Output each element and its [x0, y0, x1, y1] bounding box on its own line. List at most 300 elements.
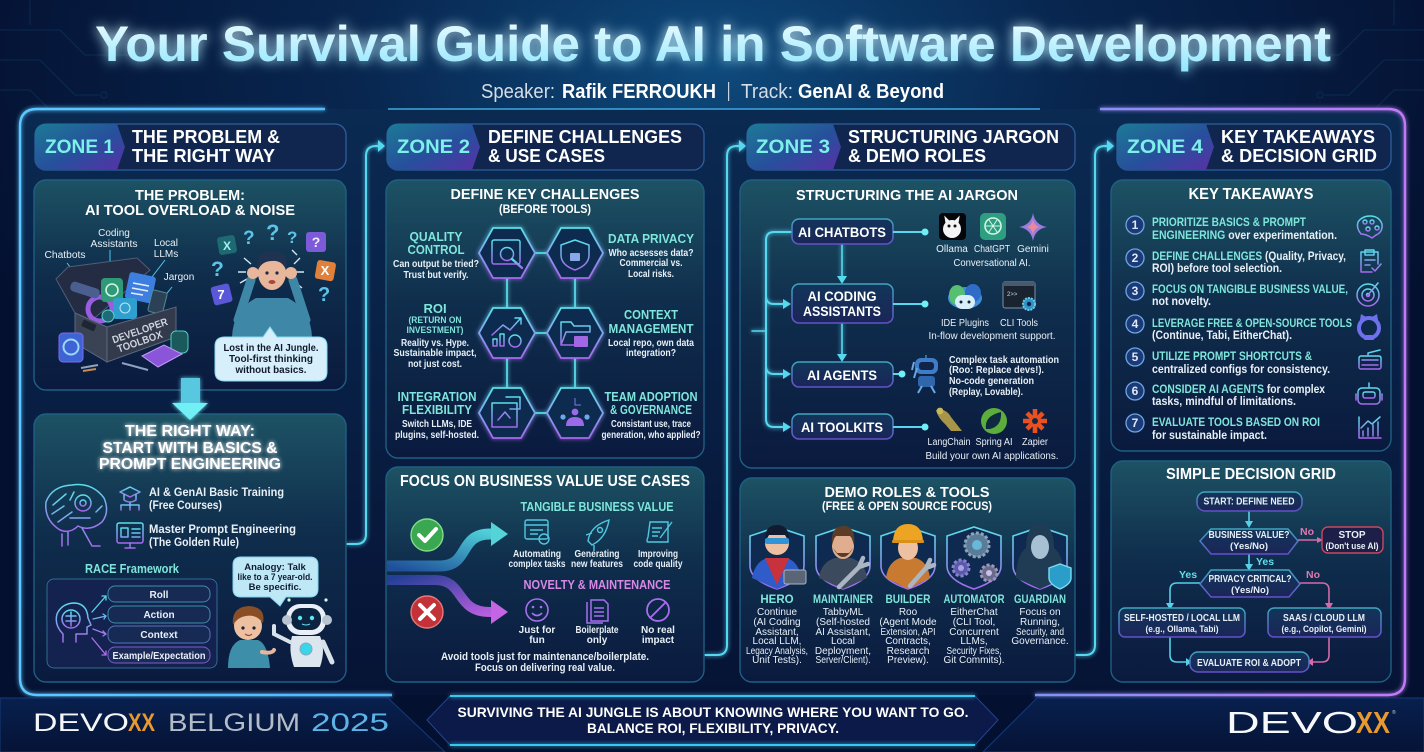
- takeaway 5: UTILIZE PROMPT SHORTCUTS &: [1152, 351, 1312, 363]
- takeaway 1: PRIORITIZE BASICS & PROMPT: [1152, 217, 1306, 229]
- node: start: [1197, 492, 1302, 511]
- challenge: ROI: Reality vs. Hype.: [401, 338, 469, 349]
- tool category labels: [44, 228, 194, 283]
- icon: integration puzzle: [492, 397, 520, 427]
- zone 1 header: THE PROBLEM &: [132, 127, 280, 147]
- RACE framework diagram: [47, 579, 217, 668]
- illustration: overwhelmed developer: ?: [287, 228, 297, 247]
- icon: code review magnifier: [492, 240, 522, 268]
- chatbot labels: Gemini: [1017, 244, 1049, 255]
- heading: key takeaways: KEY TAKEAWAYS: [1188, 186, 1314, 203]
- icon: checklist: [1361, 250, 1381, 272]
- role: builder: Contracts,: [885, 636, 931, 647]
- connector arrow: zone 1 to zone 2: [347, 140, 385, 544]
- heading: define key challenges: [450, 186, 640, 216]
- role: builder: Extension, API: [880, 627, 936, 638]
- role: guardian: Focus on: [1019, 607, 1061, 618]
- node: privacy critical: PRIVACY CRITICAL?: [1208, 574, 1292, 585]
- jargon tree connectors: [752, 232, 842, 427]
- use case: just for fun: Just for: [519, 625, 555, 636]
- role: automator: EitherChat: [950, 607, 998, 618]
- icon: Ollama: [939, 213, 966, 240]
- illustration: boy and robot: [228, 598, 332, 668]
- zone 3 header: ZONE 3: [756, 137, 830, 158]
- prompt engineering text: Master Prompt Engineering: [149, 522, 296, 536]
- footer side panels: [0, 698, 1424, 752]
- icon: monitor: [117, 523, 143, 548]
- zone 1 header: [35, 124, 346, 170]
- takeaway 5: [1152, 351, 1330, 376]
- role: guardian: GUARDIAN: [1014, 594, 1066, 606]
- speaker and track line: Track:: [741, 81, 793, 103]
- role: guardian: Security, and: [1016, 627, 1064, 638]
- logo: Devoxx Belgium 2025: [33, 709, 389, 737]
- role: hero: [746, 525, 808, 666]
- takeaway 1: [1152, 217, 1337, 242]
- challenge: quality control: Trust but verify.: [404, 270, 469, 281]
- role: hero: Local LLM,: [753, 636, 801, 647]
- summary text: Focus on delivering real value.: [475, 662, 615, 674]
- challenge: data privacy: [608, 231, 694, 280]
- label: yes: Yes: [1256, 556, 1274, 568]
- heading: demo roles: (FREE & OPEN SOURCE FOCUS): [822, 501, 992, 513]
- role: maintainer: MAINTAINER: [813, 594, 874, 606]
- RACE items: Roll: [150, 590, 169, 601]
- label: yes left: Yes: [1179, 569, 1197, 581]
- node: self-hosted: (e.g., Ollama, Tabi): [1146, 624, 1218, 635]
- callout: analogy bubble: like to a 7 year-old.: [238, 572, 312, 583]
- coding assistant labels: In-flow development support.: [928, 331, 1056, 342]
- branch dots: [893, 228, 928, 430]
- node: AI coding assistants: AI CODING: [808, 289, 876, 304]
- RACE items: [108, 586, 210, 663]
- use case: generating new features: new features: [571, 559, 623, 570]
- node: SaaS cloud: SAAS / CLOUD LLM: [1283, 613, 1365, 624]
- icon: red cross: [411, 596, 443, 628]
- challenge: team adoption and governance: TEAM ADOPTION: [604, 389, 698, 404]
- toolkit labels: Spring AI: [976, 437, 1012, 448]
- use case: just for fun: [519, 599, 555, 646]
- icon: target: [1357, 283, 1379, 306]
- node: business value: [1200, 529, 1298, 554]
- flow connectors: [1166, 511, 1333, 666]
- RACE items: Example/Expectation: [112, 651, 206, 662]
- RACE items: Context: [140, 630, 178, 641]
- challenge: data privacy: Commercial vs.: [620, 258, 683, 269]
- footer banner: BALANCE ROI, FLEXIBILITY, PRIVACY.: [587, 720, 839, 736]
- node: stop: STOP: [1338, 530, 1366, 541]
- badge numerals: 4: [1132, 317, 1139, 331]
- icon: shield lock: [561, 240, 589, 270]
- arrow: problem to right way: [172, 378, 208, 420]
- callout: analogy bubble: Analogy: Talk: [244, 562, 307, 573]
- node: AI chatbots: [792, 219, 893, 244]
- heading: decision grid: SIMPLE DECISION GRID: [1166, 466, 1336, 483]
- footer banner: [427, 696, 998, 745]
- challenge: integration flexibility: FLEXIBILITY: [402, 402, 472, 417]
- role: automator: Git Commits).: [943, 655, 1005, 666]
- prompt engineering text: [149, 522, 296, 549]
- challenge: integration flexibility: INTEGRATION: [398, 389, 476, 404]
- toolkit labels: Build your own AI applications.: [926, 451, 1058, 462]
- number badges: [1126, 216, 1144, 432]
- takeaway 7: [1152, 417, 1320, 442]
- footer banner: SURVIVING THE AI JUNGLE IS ABOUT KNOWING WHERE YOU WANT TO GO.: [458, 704, 968, 720]
- challenge: quality control: CONTROL: [408, 242, 465, 257]
- node: AI chatbots: AI CHATBOTS: [798, 225, 886, 240]
- role: maintainer: [813, 526, 874, 666]
- logo: Devoxx Belgium 2025: XX: [128, 709, 155, 737]
- badge numerals: 5: [1132, 350, 1139, 364]
- icon: Zapier: [1023, 409, 1047, 433]
- illustration: overwhelmed developer: X: [223, 239, 231, 253]
- takeaway 2: [1152, 251, 1346, 275]
- prompt engineering text: (The Golden Rule): [149, 535, 239, 549]
- logo: Devoxx Belgium 2025: BELGIUM: [168, 709, 300, 737]
- flow arrow: novelty: [387, 580, 508, 624]
- illustration: overwhelmed developer: [210, 220, 336, 337]
- speaker and track line: GenAI & Beyond: [798, 81, 944, 103]
- challenge: ROI: ROI: [423, 301, 447, 316]
- zone 3 header: [747, 124, 1075, 170]
- role: builder: [879, 524, 937, 666]
- panel: key takeaways: [1111, 180, 1391, 451]
- logo: Devoxx: ®: [1392, 709, 1396, 716]
- node: start: START: DEFINE NEED: [1204, 496, 1294, 508]
- heading: the problem: [85, 187, 295, 219]
- training text: AI & GenAI Basic Training: [149, 485, 284, 499]
- tool category labels: LLMs: [154, 249, 178, 260]
- challenge: team adoption and governance: & GOVERNANCE: [610, 402, 692, 417]
- panel: structuring the AI jargon: [740, 180, 1075, 468]
- use case: generating new features: Generating: [574, 549, 620, 560]
- main title: Your Survival Guide to AI in Software Development: [95, 16, 1331, 72]
- role: builder: Roo: [899, 607, 918, 618]
- challenge: ROI: not just cost.: [408, 359, 462, 370]
- role: guardian: [1011, 523, 1071, 647]
- node: business value: (Yes/No): [1230, 541, 1268, 552]
- node: AI coding assistants: [792, 284, 893, 323]
- tool category labels: Assistants: [90, 239, 138, 250]
- icon: developer toolbox: DEVELOPER: [111, 316, 170, 346]
- heading: the right way: START WITH BASICS &: [102, 440, 278, 457]
- badge numerals: 1: [1132, 218, 1139, 232]
- logo: Devoxx: DEVO: [1226, 705, 1358, 740]
- takeaway 4: (Continue, Tabi, EitherChat).: [1152, 330, 1292, 342]
- takeaway 6: CONSIDER AI AGENTS for complex: [1152, 384, 1326, 396]
- coding assistant labels: IDE Plugins: [941, 318, 989, 329]
- node: stop: (Don't use AI): [1326, 541, 1378, 552]
- agent description: (Roo: Replace devs!).: [949, 364, 1044, 376]
- use case: no real impact: impact: [642, 635, 675, 646]
- zone 3 header: & DEMO ROLES: [848, 146, 986, 166]
- challenge: ROI: (RETURN ON: [408, 315, 462, 325]
- role: hero: HERO: [760, 594, 794, 606]
- takeaway 5: centralized configs for consistency.: [1152, 364, 1330, 376]
- node: self-hosted: [1119, 608, 1245, 637]
- label: no right: No: [1306, 569, 1320, 581]
- training text: [149, 485, 284, 512]
- icon: ROI chart: [492, 318, 521, 347]
- icon: GitHub: [1359, 314, 1379, 340]
- use case: boilerplate only: only: [587, 635, 608, 646]
- logo: Devoxx: [1226, 705, 1396, 740]
- challenge: data privacy: Who acsesses data?: [608, 248, 694, 259]
- chatbot labels: Ollama: [936, 244, 968, 255]
- illustration: overwhelmed developer: X: [321, 263, 330, 278]
- callout: analogy bubble: Be specific.: [249, 582, 301, 593]
- illustration: overwhelmed developer: ?: [318, 284, 330, 306]
- challenge: context management: MANAGEMENT: [608, 321, 694, 336]
- role: maintainer: Server/Client).: [816, 655, 870, 666]
- callout: lost in the AI jungle: [215, 327, 327, 381]
- panel: the right way: [34, 414, 346, 682]
- illustration: overwhelmed developer: 7: [217, 287, 225, 302]
- icon: developer toolbox: TOOLBOX: [116, 329, 164, 355]
- icon: Gemini star: [1019, 213, 1047, 241]
- challenge: context management: CONTEXT: [624, 307, 678, 322]
- challenge: quality control: Can output be tried?: [393, 259, 479, 270]
- illustration: overwhelmed developer: ?: [312, 234, 320, 250]
- panel: define key challenges: [386, 180, 704, 458]
- role: hero: Continue: [757, 607, 797, 618]
- callout: analogy bubble: [233, 557, 318, 606]
- RACE items: Action: [143, 610, 175, 621]
- challenge: quality control: [393, 229, 479, 281]
- role: maintainer: TabbyML: [823, 607, 864, 618]
- training text: (Free Courses): [149, 498, 222, 512]
- chatbot labels: Conversational AI.: [954, 258, 1030, 269]
- heading: the right way: [99, 423, 281, 473]
- callout: lost in the AI jungle: Tool-first thinking: [229, 353, 313, 365]
- node: stop: [1322, 527, 1383, 553]
- takeaway 7: EVALUATE TOOLS BASED ON ROI: [1152, 417, 1320, 429]
- role: automator: [943, 527, 1005, 666]
- node: business value: BUSINESS VALUE?: [1208, 530, 1290, 541]
- takeaway 3: not novelty.: [1152, 296, 1211, 308]
- coding assistant labels: [928, 318, 1056, 342]
- illustration: overwhelmed developer: ?: [211, 258, 224, 281]
- role: automator: LLMs,: [960, 636, 988, 647]
- use case: generating new features: [571, 520, 623, 570]
- heading: structuring jargon: STRUCTURING THE AI JARGON: [796, 187, 1018, 204]
- icon: AI agent robot: [912, 355, 938, 393]
- zone 2 header: ZONE 2: [397, 137, 470, 158]
- challenge: quality control: QUALITY: [410, 229, 463, 244]
- use case: no real impact: [641, 599, 675, 646]
- logo: Devoxx Belgium 2025: 2025: [311, 709, 389, 737]
- challenge: integration flexibility: Switch LLMs, IDE: [402, 419, 472, 430]
- use case: improving code quality: Improving: [638, 549, 678, 560]
- challenge: context management: [608, 307, 694, 359]
- panel: demo roles and tools: [740, 478, 1075, 682]
- zone 1 header: THE RIGHT WAY: [132, 146, 275, 166]
- challenge: integration flexibility: [395, 389, 479, 441]
- panel: the problem: [34, 180, 346, 390]
- node: evaluate: EVALUATE ROI & ADOPT: [1197, 658, 1301, 669]
- use case: boilerplate only: [576, 600, 619, 646]
- badge numerals: 2: [1132, 251, 1139, 265]
- heading: RACE framework: RACE Framework: [85, 562, 179, 576]
- icon: brain: [1357, 216, 1382, 238]
- node: evaluate: [1190, 652, 1309, 672]
- takeaway 6: tasks, mindful of limitations.: [1152, 396, 1296, 408]
- connector arrow: zone 3 to zone 4: [1076, 140, 1114, 655]
- challenge: context management: integration?: [626, 348, 676, 359]
- node: SaaS cloud: [1268, 608, 1381, 637]
- heading: demo roles: [822, 485, 992, 513]
- node: AI toolkits: AI TOOLKITS: [801, 420, 883, 435]
- use case: no real impact: No real: [641, 625, 675, 636]
- callout: lost in the AI jungle: Lost in the AI Jungle.: [224, 342, 319, 354]
- role: automator: Security Fixes,: [946, 646, 1002, 657]
- icon: keyboard: [1359, 350, 1381, 369]
- challenge: ROI: Sustainable impact,: [394, 348, 477, 359]
- role: hero: (AI Coding: [753, 617, 801, 628]
- role: automator: AUTOMATOR: [944, 594, 1005, 606]
- takeaway 2: DEFINE CHALLENGES (Quality, Privacy,: [1152, 251, 1346, 263]
- agent description: [949, 354, 1059, 398]
- heading: the problem: AI TOOL OVERLOAD & NOISE: [85, 202, 295, 219]
- heading: the problem: THE PROBLEM:: [135, 187, 245, 204]
- challenge: data privacy: Local risks.: [628, 269, 674, 280]
- zone 2 header: DEFINE CHALLENGES: [488, 127, 682, 147]
- chatbot labels: [936, 244, 1049, 269]
- zone 4 header: & DECISION GRID: [1221, 146, 1377, 166]
- challenge: team adoption and governance: [602, 389, 700, 441]
- icon: folder: [561, 322, 590, 345]
- takeaway 1: ENGINEERING over experimentation.: [1152, 230, 1337, 242]
- role: hero: Assistant,: [755, 627, 799, 638]
- challenge: integration flexibility: plugins, self-hosted.: [395, 430, 479, 441]
- role: maintainer: AI Assistant,: [815, 627, 871, 638]
- tool category labels: Jargon: [164, 272, 194, 283]
- use case: improving code quality: [634, 522, 683, 570]
- icon: graduation cap: [120, 487, 140, 510]
- use case: automating complex tasks: [508, 520, 566, 570]
- heading: the right way: THE RIGHT WAY:: [125, 423, 255, 440]
- heading: business value: FOCUS ON BUSINESS VALUE USE CASES: [400, 473, 690, 490]
- use case: improving code quality: code quality: [634, 559, 683, 570]
- chatbot labels: ChatGPT: [974, 244, 1010, 255]
- icon: IDE plugins: [948, 284, 982, 309]
- zone 2 header: [387, 124, 704, 170]
- role: hero: Unit Tests).: [752, 655, 802, 666]
- use case: boilerplate only: Boilerplate: [576, 625, 619, 636]
- role: builder: (Agent Mode: [879, 617, 937, 628]
- heading: demo roles: DEMO ROLES & TOOLS: [824, 485, 990, 501]
- node: AI toolkits: [792, 414, 893, 439]
- agent description: Complex task automation: [949, 354, 1059, 366]
- icon: Spring AI: [981, 408, 1007, 434]
- role: automator: (CLI Tool,: [953, 617, 995, 628]
- takeaway 3: FOCUS ON TANGIBLE BUSINESS VALUE,: [1152, 284, 1348, 296]
- takeaway 3: [1152, 284, 1348, 308]
- node: AI agents: AI AGENTS: [807, 368, 877, 383]
- toolkit labels: Zapier: [1022, 437, 1049, 448]
- challenge: team adoption and governance: generation, who applied?: [602, 430, 700, 441]
- tool category labels: Chatbots: [44, 250, 86, 261]
- icon: robot: [1356, 383, 1382, 404]
- badge numerals: 3: [1132, 284, 1139, 298]
- use case: automating complex tasks: Automating: [513, 549, 561, 560]
- heading: the right way: PROMPT ENGINEERING: [99, 456, 281, 473]
- zone 3 header: STRUCTURING JARGON: [848, 127, 1059, 147]
- icon: LangChain parrot: [936, 408, 962, 431]
- role: guardian: Running,: [1020, 617, 1060, 628]
- toolkit labels: LangChain: [928, 437, 970, 448]
- role: builder: Research: [887, 646, 929, 657]
- use case: automating complex tasks: complex tasks: [508, 559, 566, 570]
- node: SaaS cloud: (e.g., Copilot, Gemini): [1282, 624, 1366, 635]
- challenge: ROI: [394, 301, 477, 370]
- role: automator: Concurrent: [949, 627, 999, 638]
- heading: define key challenges: (BEFORE TOOLS): [499, 204, 591, 216]
- role: maintainer: (Self-hosted: [816, 617, 870, 628]
- coding assistant labels: CLI Tools: [1000, 318, 1038, 329]
- icon: neon brain: [46, 485, 107, 546]
- role: hero: Legacy Analysis,: [746, 646, 808, 657]
- panel: simple decision grid: [1111, 461, 1391, 682]
- tool category labels: Local: [154, 238, 178, 249]
- use case: just for fun: fun: [529, 635, 545, 646]
- logo: Devoxx Belgium 2025: DEVO: [33, 709, 129, 737]
- zone 4 header: KEY TAKEAWAYS: [1221, 127, 1375, 147]
- tool category labels: Coding: [98, 228, 130, 239]
- role: maintainer: Deployment,: [815, 646, 871, 657]
- takeaway 7: for sustainable impact.: [1152, 430, 1267, 442]
- speaker and track line: Rafik FERROUKH: [562, 81, 716, 103]
- illustration: overwhelmed developer: ?: [243, 228, 255, 249]
- panel: business value use cases: [386, 467, 704, 682]
- summary text: [441, 651, 649, 674]
- role: maintainer: Local: [831, 636, 855, 647]
- icon: developer toolbox: [56, 250, 188, 371]
- zone 4 header: [1117, 124, 1391, 170]
- icon: green check: [411, 519, 443, 551]
- main frame: [20, 109, 1405, 695]
- icon: ChatGPT: [980, 213, 1006, 240]
- challenge: data privacy: DATA PRIVACY: [608, 231, 694, 246]
- node: AI agents: [792, 362, 893, 387]
- zone 2 header: & USE CASES: [488, 146, 605, 166]
- icon: CLI tools: 2>>: [1007, 292, 1018, 298]
- role: guardian: Governance.: [1011, 636, 1069, 647]
- heading: tangible business value: TANGIBLE BUSINESS VALUE: [520, 500, 674, 514]
- agent description: (Replay, Lovable).: [949, 386, 1023, 398]
- zone 4 header: ZONE 4: [1127, 137, 1203, 158]
- summary text: Avoid tools just for maintenance/boilerplate.: [441, 651, 649, 663]
- speaker and track line: Speaker:: [481, 81, 555, 103]
- agent description: No-code generation: [949, 375, 1034, 387]
- role: builder: BUILDER: [886, 594, 931, 606]
- heading: define key challenges: DEFINE KEY CHALLENGES: [450, 186, 640, 203]
- takeaway 6: [1152, 384, 1326, 408]
- challenge: context management: Local repo, own data: [608, 338, 694, 349]
- takeaway 4: LEVERAGE FREE & OPEN-SOURCE TOOLS: [1152, 318, 1352, 330]
- node: privacy critical: (Yes/No): [1231, 585, 1269, 596]
- flow arrow: tangible value: [387, 522, 508, 566]
- challenge: team adoption and governance: Consistant use, trace: [611, 419, 691, 430]
- illustration: overwhelmed developer: ?: [266, 220, 279, 245]
- node: AI coding assistants: ASSISTANTS: [803, 304, 881, 319]
- icon: CLI tools: [1003, 282, 1035, 310]
- speaker and track line: [481, 81, 944, 103]
- challenge: ROI: INVESTMENT): [406, 325, 464, 335]
- zone 1 header: ZONE 1: [45, 137, 114, 158]
- role: builder: Preview).: [887, 655, 929, 666]
- icon: team: [560, 398, 590, 426]
